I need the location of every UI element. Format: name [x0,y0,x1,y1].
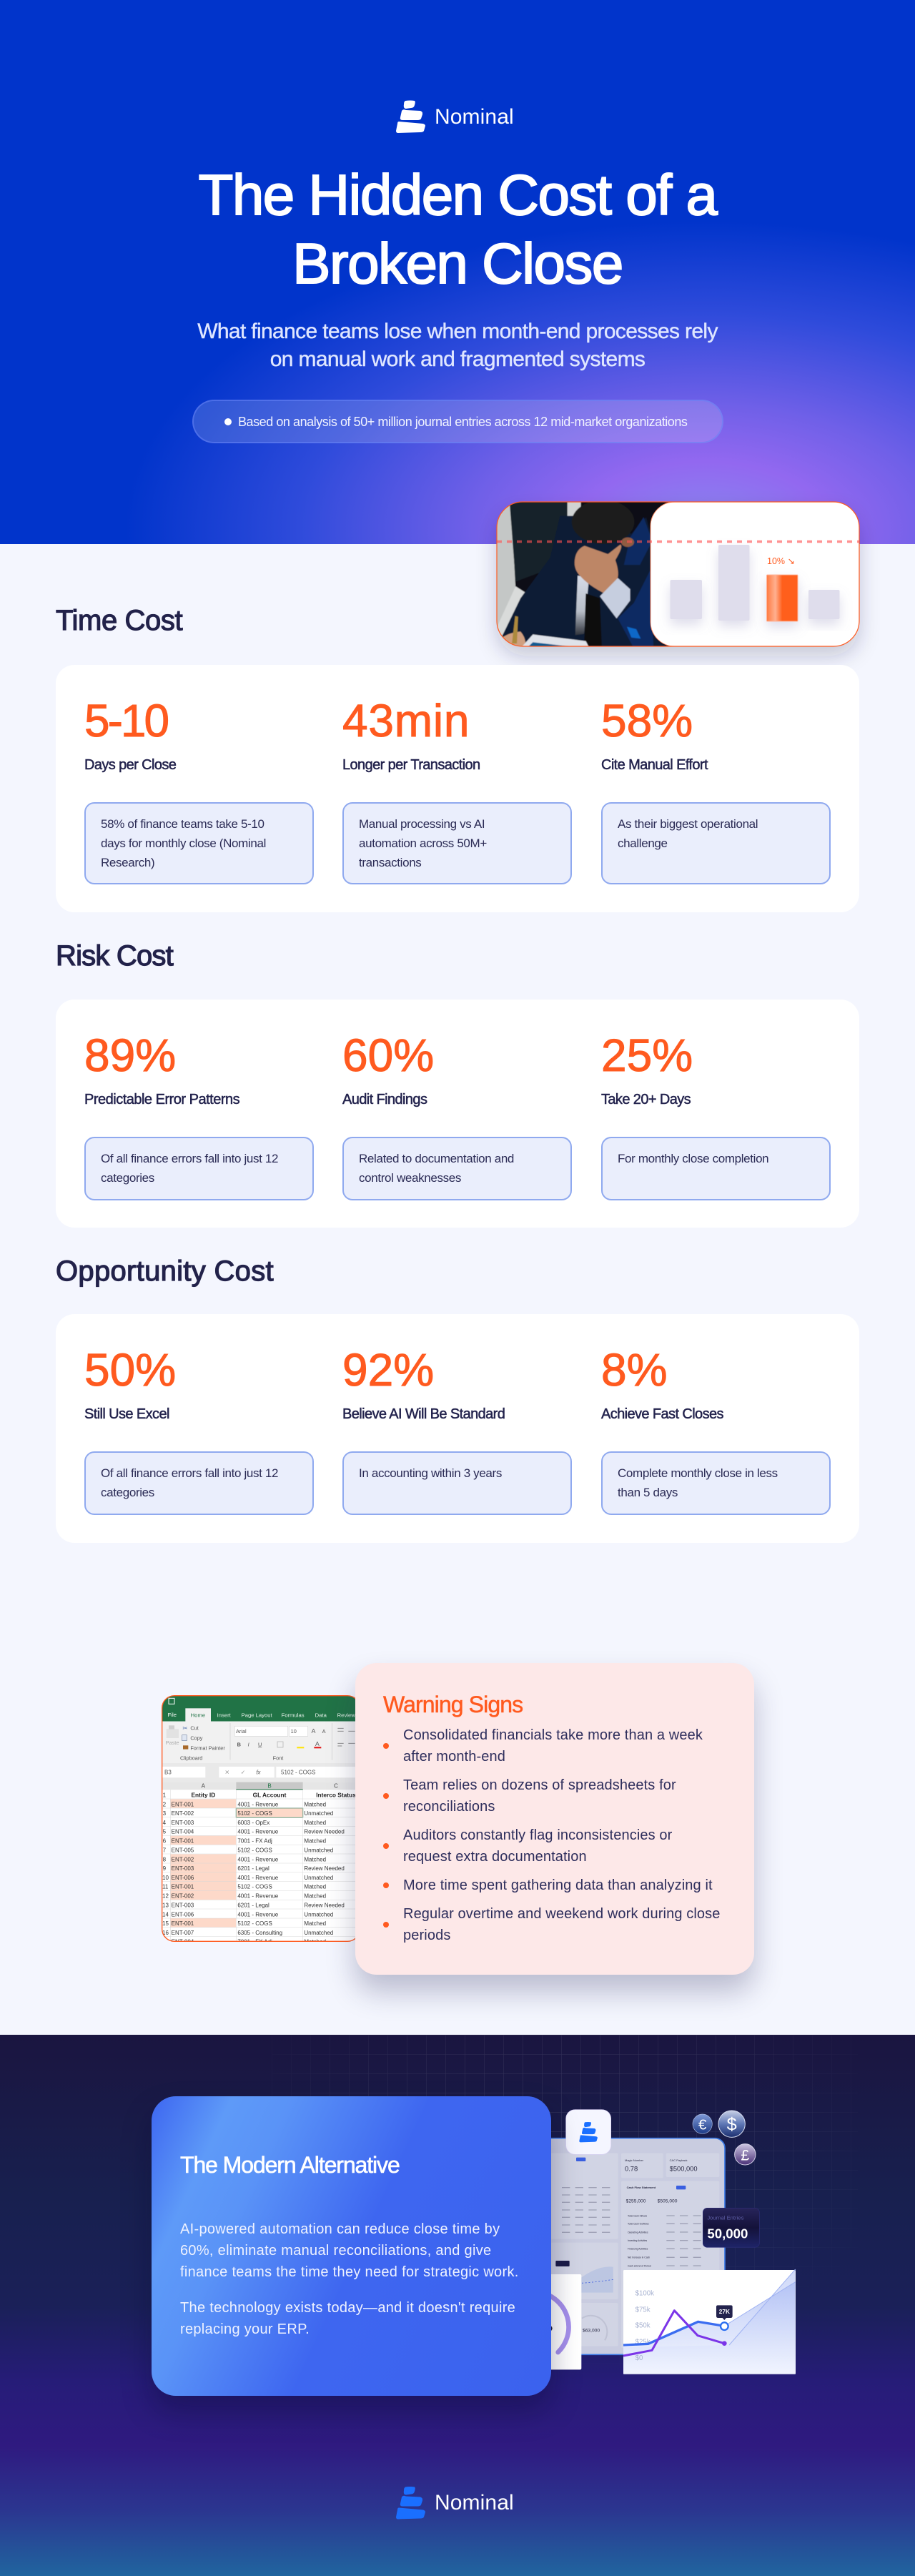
spreadsheet screenshot: Review Needed [304,1829,345,1835]
line chart [623,2269,796,2374]
stat: predictable error patterns [84,1030,314,1200]
heading: The Modern Alternative: The Modern Alternative [180,2152,400,2178]
spreadsheet screenshot: U [258,1741,262,1747]
spreadsheet screenshot: 10 [291,1728,297,1734]
coin: dollar [718,2111,745,2137]
spreadsheet screenshot: 5102 - COGS [237,1810,272,1817]
warning item 2: reconciliations [403,1799,495,1815]
panel: risk cost stats [56,1000,859,1228]
spreadsheet screenshot: Matched [304,1838,326,1845]
spreadsheet screenshot: Insert [217,1712,232,1719]
pill dot [224,418,232,425]
spreadsheet screenshot: 6305 - Consulting [237,1930,282,1936]
subtitle [197,320,718,371]
stat: still use excel: 50% [84,1344,176,1396]
spreadsheet screenshot: 1 [163,1792,167,1799]
spreadsheet screenshot: ✂ [182,1724,188,1732]
spreadsheet screenshot: Matched [304,1884,326,1890]
dashboard collage [551,2109,796,2374]
dashboard window: CAC Payback [670,2158,688,2162]
stat: believe AI will be standard: Believe AI Will Be Standard [342,1406,505,1422]
spreadsheet screenshot: ENT-002 [172,1810,194,1817]
heading: Warning Signs: Warning Signs [383,1692,523,1717]
stat: cite manual effort: Cite Manual Effort [601,757,708,773]
spreadsheet screenshot: B [237,1741,241,1747]
stat: take 20+ days [601,1030,831,1200]
body paragraph 2: replacing your ERP. [180,2321,310,2337]
spreadsheet screenshot: Page Layout [242,1712,273,1719]
warning item 5: Regular overtime and weekend work during close [403,1906,721,1922]
spreadsheet screenshot: 12 [162,1893,169,1900]
stat: achieve fast closes: than 5 days [618,1486,678,1499]
heading: Opportunity Cost: Opportunity Cost [56,1255,274,1287]
spreadsheet screenshot: ENT-001 [172,1801,194,1807]
stat: audit findings: Audit Findings [342,1092,427,1107]
spreadsheet screenshot: ENT-007 [172,1930,194,1936]
coin: pound: £ [741,2146,749,2163]
dashboard window: $63,000 [583,2329,600,2334]
spreadsheet screenshot: 2 [163,1801,167,1807]
stat: predictable error patterns: Of all finance errors fall into just 12 [101,1152,278,1165]
spreadsheet screenshot: 3 [163,1810,167,1817]
spreadsheet screenshot: A [315,1740,320,1747]
background grid [279,2035,856,2270]
footer logo: Nominal: Nominal [435,2491,514,2515]
spreadsheet screenshot: Cut [190,1724,199,1731]
dashboard window [534,2138,725,2354]
warning item 3: Auditors constantly flag inconsistencies or [403,1827,672,1843]
spreadsheet screenshot: Unmatched [304,1911,333,1918]
hero header [0,0,915,544]
spreadsheet screenshot: 4001 - Revenue [237,1829,279,1835]
line chart: $50k [635,2322,651,2330]
logo: Nominal: Nominal [435,105,514,129]
coin: euro: € [698,2116,707,2133]
spreadsheet screenshot: Interco Status [316,1792,356,1799]
stat: longer per transaction: Longer per Transaction [342,757,480,773]
body paragraph 2: The technology exists today—and it doesn't require [180,2300,515,2316]
spreadsheet screenshot: ENT-003 [172,1902,194,1908]
spreadsheet screenshot: 8 [163,1856,167,1862]
spreadsheet screenshot: 4001 - Revenue [237,1911,279,1918]
dashboard window: $255,000 [626,2199,646,2204]
coin: pound [735,2144,756,2165]
stat: achieve fast closes: Achieve Fast Closes [601,1406,723,1422]
stat: take 20+ days: 25% [601,1030,693,1081]
stat: still use excel: categories [101,1486,154,1499]
spreadsheet screenshot: Clipboard [180,1755,202,1761]
spreadsheet screenshot: 13 [162,1902,169,1908]
callout: journal entries: 50,000 [707,2226,748,2241]
logo: Nominal [396,100,514,133]
panel: time cost stats [56,665,859,912]
spreadsheet screenshot: ENT-001 [172,1920,194,1927]
heading: Risk Cost: Risk Cost [56,940,173,972]
spreadsheet screenshot: 4 [163,1820,167,1826]
stat: longer per transaction [342,695,572,884]
spreadsheet screenshot: Review Needed [304,1902,345,1908]
dashboard window: Financing Activities [628,2248,648,2251]
spreadsheet screenshot: Home [191,1712,205,1719]
spreadsheet screenshot: A [312,1727,316,1734]
stat: audit findings: Related to documentation and [359,1152,514,1165]
line chart: $75k [635,2306,651,2314]
spreadsheet screenshot: ✓ [241,1770,245,1776]
dashboard window: Cash at End of Period [628,2264,651,2267]
panel: opportunity cost stats [56,1314,859,1543]
spreadsheet screenshot: 4001 - Revenue [237,1893,279,1900]
spreadsheet screenshot: 7001 - FX Adj [237,1939,272,1945]
dashboard window: $505,000 [658,2199,678,2204]
warning item 3: request extra documentation [403,1849,587,1865]
label: 10% down: 10% ↘ [767,556,795,566]
spreadsheet screenshot: A [322,1728,326,1734]
stat: longer per transaction: Manual processing vs AI [359,817,485,831]
body paragraph 1: AI-powered automation can reduce close time by [180,2221,500,2237]
white chart panel [651,502,693,646]
stat: longer per transaction: automation across 50M+ [359,837,487,850]
white gauge panel [534,2274,581,2369]
stat: achieve fast closes: 8% [601,1344,668,1396]
stat: longer per transaction: transactions [359,856,421,869]
spreadsheet screenshot: 6201 - Legal [237,1902,269,1908]
stat: days per close: Days per Close [84,757,176,773]
spreadsheet screenshot: 5 [163,1829,167,1835]
dashboard window: Investing Activities [628,2239,648,2242]
spreadsheet screenshot: A [202,1783,206,1790]
spreadsheet screenshot: Paste [166,1739,179,1746]
spreadsheet screenshot: 15 [162,1920,169,1927]
warning item 1: Consolidated financials take more than a week [403,1727,703,1743]
panel: the modern alternative [152,2096,551,2396]
stat: believe AI will be standard [342,1344,572,1515]
spreadsheet screenshot: 6 [163,1838,167,1845]
body paragraph 2 [180,2300,515,2337]
line chart: 27K [719,2308,730,2315]
spreadsheet screenshot: 4001 - Revenue [237,1801,279,1807]
stat: audit findings [342,1030,572,1200]
stat: cite manual effort: As their biggest operational [618,817,758,831]
bars [671,545,839,621]
stat: achieve fast closes [600,1344,831,1515]
heading: Time Cost: Time Cost [56,605,182,636]
stat: cite manual effort [601,695,831,884]
line chart: $0 [635,2354,643,2362]
stat: still use excel: Still Use Excel [84,1406,169,1422]
photo: man with hand on forehead [498,502,669,646]
spreadsheet screenshot: Unmatched [304,1810,333,1817]
spreadsheet screenshot: ENT-001 [172,1838,194,1845]
dashboard window: Cash Flow Statement [627,2186,656,2189]
stat: take 20+ days: Take 20+ Days [601,1092,691,1107]
stat: believe AI will be standard: In accounting within 3 years [359,1466,502,1480]
body paragraph 1: finance teams the time they need for strategic work. [180,2264,519,2280]
spreadsheet screenshot: Review [337,1712,355,1719]
spreadsheet screenshot: File [168,1712,177,1718]
spreadsheet screenshot: Unmatched [304,1847,333,1853]
stat: predictable error patterns: Predictable Error Patterns [84,1092,239,1107]
spreadsheet screenshot: ENT-005 [172,1847,194,1853]
spreadsheet screenshot: B [267,1783,272,1790]
warning item 2: Team relies on dozens of spreadsheets for [403,1777,676,1793]
body paragraph 1: 60%, eliminate manual reconciliations, and give [180,2243,491,2259]
stat: days per close: Research) [101,856,154,869]
line chart: $100k [635,2290,654,2298]
spreadsheet screenshot: 5102 - COGS [237,1884,272,1890]
spreadsheet screenshot: Font [273,1755,283,1761]
spreadsheet screenshot: ENT-004 [172,1829,194,1835]
spreadsheet screenshot: Unmatched [304,1930,333,1936]
dashboard window: Total Cash Inflows [628,2214,647,2217]
title: The Hidden Cost of a [199,163,716,227]
spreadsheet screenshot: ENT-003 [172,1865,194,1872]
pill text: Based on analysis of 50+ million journal entries across 12 mid-market organizations [238,415,687,429]
dashboard window: 0.78 [625,2166,638,2173]
footer logo: Nominal [396,2487,514,2520]
spreadsheet screenshot: ENT-004 [172,1939,194,1945]
spreadsheet screenshot: 14 [162,1911,169,1918]
title: Broken Close [292,232,623,295]
spreadsheet screenshot: Matched [304,1801,326,1807]
spreadsheet screenshot: Matched [304,1820,326,1826]
source pill [192,400,723,443]
spreadsheet screenshot: 6201 - Legal [237,1865,269,1872]
warning item 1: after month-end [403,1749,505,1765]
spreadsheet screenshot: ENT-003 [172,1820,194,1826]
spreadsheet screenshot: C [334,1783,338,1790]
spreadsheet screenshot: Data [315,1712,327,1719]
spreadsheet screenshot: 16 [162,1930,169,1936]
spreadsheet screenshot: ENT-002 [172,1856,194,1862]
title [199,163,718,295]
spreadsheet screenshot: Copy [190,1735,203,1742]
coin: dollar: $ [727,2115,737,2135]
warning item 5: periods [403,1928,450,1943]
spreadsheet screenshot: 5102 - COGS [237,1847,272,1853]
spreadsheet screenshot: Unmatched [304,1875,333,1881]
dashboard window: Total Cash Outflows [628,2223,649,2226]
spreadsheet screenshot: B3 [164,1770,172,1776]
stat: longer per transaction: 43min [342,695,470,746]
spreadsheet screenshot: Matched [304,1856,326,1862]
spreadsheet screenshot: ENT-006 [172,1875,194,1881]
spreadsheet screenshot: Matched [304,1920,326,1927]
spreadsheet screenshot: Formulas [282,1712,305,1719]
spreadsheet screenshot: 6003 - OpEx [237,1820,269,1826]
warning item 2 [383,1777,676,1815]
spreadsheet screenshot: Arial [236,1728,247,1734]
callout: journal entries [703,2208,759,2247]
spreadsheet screenshot: 5102 - COGS [281,1770,315,1776]
spreadsheet screenshot: Format Painter [190,1745,225,1751]
spreadsheet screenshot: ✕ [224,1770,229,1776]
spreadsheet screenshot: GL Account [253,1792,287,1799]
spreadsheet screenshot [162,1695,355,1942]
spreadsheet screenshot: 11 [162,1884,169,1890]
stat: audit findings: 60% [342,1030,434,1081]
spreadsheet screenshot: Entity ID [191,1792,215,1799]
dashboard window: Magic Number [625,2158,644,2162]
spreadsheet screenshot: Review Needed [304,1865,345,1872]
stat: take 20+ days: For monthly close completion [618,1152,768,1165]
warning item 1 [383,1727,703,1765]
spreadsheet screenshot: 9 [163,1865,167,1872]
card outline [497,502,859,646]
coin: euro [693,2114,712,2133]
warning item 3 [383,1827,672,1865]
spreadsheet screenshot: fx [256,1770,262,1776]
dashboard window: Operating Activities [628,2231,648,2234]
spreadsheet screenshot: 4001 - Revenue [237,1856,279,1862]
callout: journal entries: Journal Entries [707,2215,744,2221]
spreadsheet screenshot: ENT-002 [172,1893,194,1900]
spreadsheet screenshot: I [248,1741,249,1747]
spreadsheet screenshot: ENT-006 [172,1911,194,1918]
stat: still use excel [84,1344,314,1515]
body paragraph 1 [180,2221,519,2280]
spreadsheet screenshot: 10 [162,1875,169,1881]
dashboard window: Net Increase in Cash [628,2256,650,2259]
warning item 5 [383,1906,721,1943]
stat: believe AI will be standard: 92% [342,1344,434,1396]
panel: warning signs [355,1663,754,1975]
highlighted cells [170,1799,303,1928]
dark section: the modern alternative [0,2035,915,2576]
spreadsheet screenshot: 5102 - COGS [237,1920,272,1927]
stat: cite manual effort: 58% [601,695,693,746]
line chart: $25k [635,2338,651,2346]
spreadsheet screenshot: 7001 - FX Adj [237,1838,272,1845]
dashboard window: $500,000 [670,2166,698,2173]
stat: achieve fast closes: Complete monthly close in less [618,1466,778,1480]
warning item 4: More time spent gathering data than analyzing it [403,1877,713,1893]
subtitle: on manual work and fragmented systems [270,347,645,371]
stat: audit findings: control weaknesses [359,1171,461,1185]
stat: predictable error patterns: categories [101,1171,154,1185]
stat: still use excel: Of all finance errors fall into just 12 [101,1466,278,1480]
stat: days per close: 5-10 [84,695,167,746]
subtitle: What finance teams lose when month-end processes rely [197,320,718,343]
stat: predictable error patterns: 89% [84,1030,176,1081]
spreadsheet screenshot: ENT-001 [172,1884,194,1890]
spreadsheet screenshot: 4001 - Revenue [237,1875,279,1881]
spreadsheet screenshot: Matched [304,1893,326,1900]
logo tile [566,2110,611,2154]
spreadsheet screenshot: Matched [304,1939,326,1945]
stat: cite manual effort: challenge [618,837,668,850]
image card: stressed executive and bar chart [487,501,869,665]
spreadsheet screenshot: 7 [163,1847,167,1853]
stat: days per close: 58% of finance teams take 5-10 [101,817,264,831]
stat: days per close [84,695,314,884]
stat: days per close: days for monthly close (Nominal [101,837,266,850]
dashed threshold line [497,541,859,543]
